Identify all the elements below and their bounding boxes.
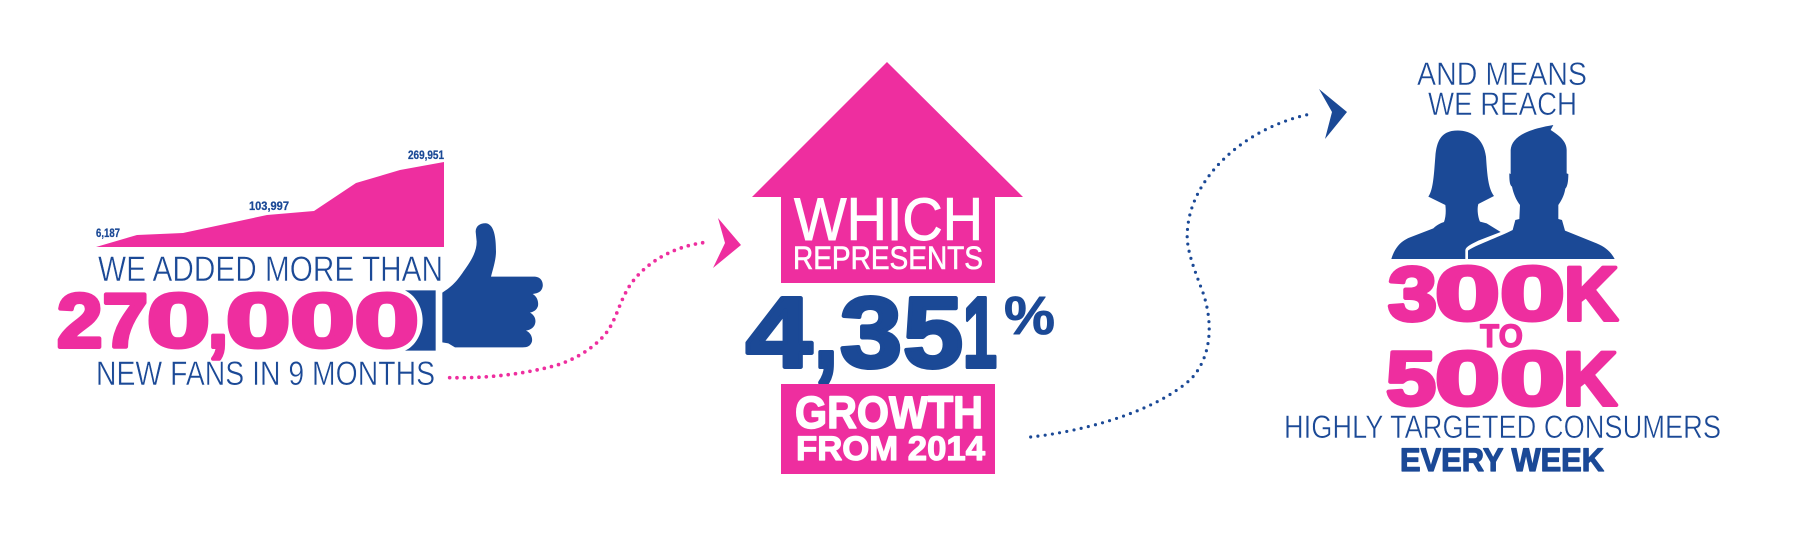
big number: 300K: 3 xyxy=(1388,252,1437,337)
subheading: every week: EVERY WEEK xyxy=(1400,442,1604,478)
area chart: fan growth xyxy=(96,162,444,247)
label: growth: GROWTH xyxy=(795,387,983,438)
big number: 270,000: , xyxy=(208,279,228,364)
big number: 270,000: 27 xyxy=(57,279,148,364)
heading: we reach: WE REACH xyxy=(1428,86,1577,122)
icon: woman silhouette xyxy=(1391,130,1501,259)
big number: 270,000: 000 xyxy=(226,279,419,364)
dotted arrow path: pink xyxy=(450,242,709,378)
heading: we added more than: WE ADDED MORE THAN xyxy=(98,250,443,289)
big number: 4,351: 5 xyxy=(903,277,963,389)
heading: which: WHICH xyxy=(794,186,983,253)
subheading: new fans in 9 months: NEW FANS IN 9 MONTHS xyxy=(96,355,435,393)
icon: man silhouette xyxy=(1468,125,1615,259)
subheading: highly targeted consumers: HIGHLY TARGETED CONSUMERS xyxy=(1284,409,1721,445)
icon: up arrow house xyxy=(752,62,1023,283)
label: from 2014: FROM 2014 xyxy=(796,430,985,468)
big number: 4,351: 3 xyxy=(840,277,902,389)
big number: 4,351: 1 xyxy=(963,277,997,389)
big number: 500K: 5 xyxy=(1386,337,1436,422)
big number: 300K: 00 xyxy=(1435,252,1565,337)
heading: represents: REPRESENTS xyxy=(793,240,983,276)
arrowhead: blue xyxy=(1319,89,1347,139)
chart label: 103,997: 103,997 xyxy=(249,201,289,213)
big number: 270,000: 0 xyxy=(147,279,210,364)
dotted arrow path: blue xyxy=(1031,115,1307,437)
label: to: TO xyxy=(1480,318,1523,354)
arrowhead: pink xyxy=(713,218,741,268)
big number: 300K: K xyxy=(1564,252,1618,337)
box: growth from 2014 xyxy=(781,384,995,474)
big number: 500K: K xyxy=(1563,337,1617,422)
heading: and means: AND MEANS xyxy=(1417,56,1587,92)
big number: 500K: 00 xyxy=(1435,337,1565,422)
thumb cuff xyxy=(405,290,436,351)
panel: growth xyxy=(746,62,1055,474)
chart label: 269,951: 269,951 xyxy=(408,150,445,162)
big number: 4,351: , xyxy=(814,277,838,389)
chart label: 6,187: 6,187 xyxy=(96,228,120,240)
panel: reach xyxy=(1284,56,1721,478)
icon: thumbs up xyxy=(442,223,543,347)
percent sign: % xyxy=(1004,286,1055,346)
big number: 4,351: 4 xyxy=(746,277,812,389)
panel: fans added xyxy=(57,150,543,393)
